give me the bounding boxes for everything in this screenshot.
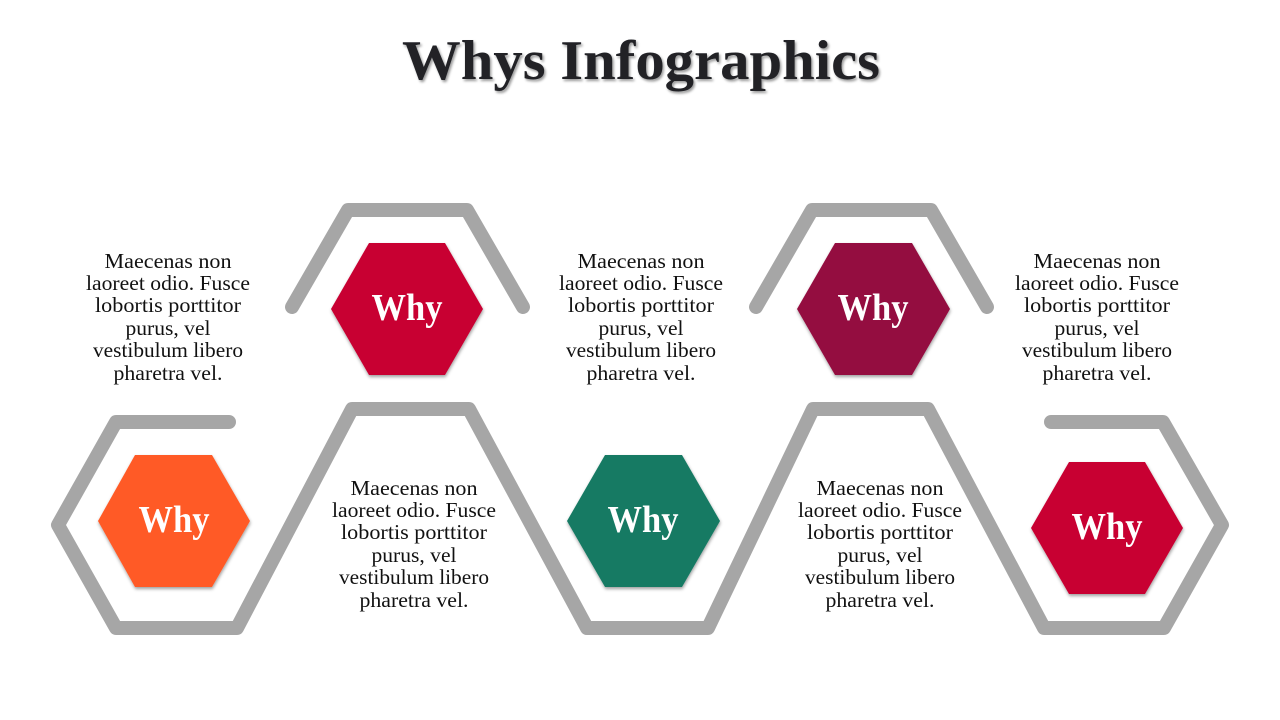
text block: top left: laoreet odio. Fusce <box>86 271 250 295</box>
hexagon: maroon Why top right <box>797 243 950 375</box>
text block: top centre: lobortis porttitor <box>568 293 714 317</box>
text block: top centre: purus, vel <box>598 316 684 340</box>
text block: top right: lobortis porttitor <box>1024 293 1170 317</box>
text block: top centre: pharetra vel. <box>586 361 696 385</box>
text block: lower left: vestibulum libero <box>339 565 489 589</box>
text block: lower right <box>798 476 962 612</box>
text block: top centre: laoreet odio. Fusce <box>559 271 723 295</box>
text block: top right: laoreet odio. Fusce <box>1015 271 1179 295</box>
text block: lower left: purus, vel <box>372 543 457 567</box>
text block: lower right: pharetra vel. <box>826 588 934 612</box>
hexagon: crimson Why right <box>1031 462 1183 594</box>
text block: top left: pharetra vel. <box>114 361 222 385</box>
hexagon: orange Why <box>98 455 250 587</box>
hexagon: crimson Why top left: Why <box>372 287 442 329</box>
connector line: lower winding hexagon path <box>58 409 1222 628</box>
text block: top centre: Maecenas non <box>578 249 705 273</box>
text block: lower left <box>332 476 496 612</box>
title: Whys Infographics <box>402 30 880 92</box>
text block: top right: pharetra vel. <box>1042 361 1152 385</box>
connector line: upper arch left <box>292 210 523 307</box>
text block: top right <box>1015 249 1179 385</box>
text block: lower right: laoreet odio. Fusce <box>798 498 962 522</box>
text block: top centre: vestibulum libero <box>566 338 716 362</box>
text block: lower right: purus, vel <box>838 543 923 567</box>
connector line: upper arch right <box>756 210 987 307</box>
text block: lower left: laoreet odio. Fusce <box>332 498 496 522</box>
text block: lower left: pharetra vel. <box>360 588 468 612</box>
hexagon: crimson Why top left <box>331 243 483 375</box>
text block: top left <box>86 249 250 385</box>
text block: lower left: Maecenas non <box>350 476 478 500</box>
text block: lower right: lobortis porttitor <box>807 520 953 544</box>
text block: lower right: vestibulum libero <box>805 565 955 589</box>
hexagon: green Why: Why <box>608 499 678 541</box>
text block: top right: Maecenas non <box>1034 249 1161 273</box>
text block: top left: lobortis porttitor <box>95 293 241 317</box>
text block: top left: purus, vel <box>126 316 211 340</box>
hexagon: orange Why: Why <box>138 499 210 541</box>
text block: top left: vestibulum libero <box>93 338 243 362</box>
text block: top right: purus, vel <box>1054 316 1140 340</box>
text block: lower left: lobortis porttitor <box>341 520 487 544</box>
text block: top right: vestibulum libero <box>1022 338 1172 362</box>
hexagon: crimson Why right: Why <box>1072 506 1142 548</box>
text block: lower right: Maecenas non <box>816 476 944 500</box>
text block: top centre <box>559 249 723 385</box>
text block: top left: Maecenas non <box>104 249 232 273</box>
hexagon: green Why <box>567 455 720 587</box>
hexagon: maroon Why top right: Why <box>838 287 908 329</box>
